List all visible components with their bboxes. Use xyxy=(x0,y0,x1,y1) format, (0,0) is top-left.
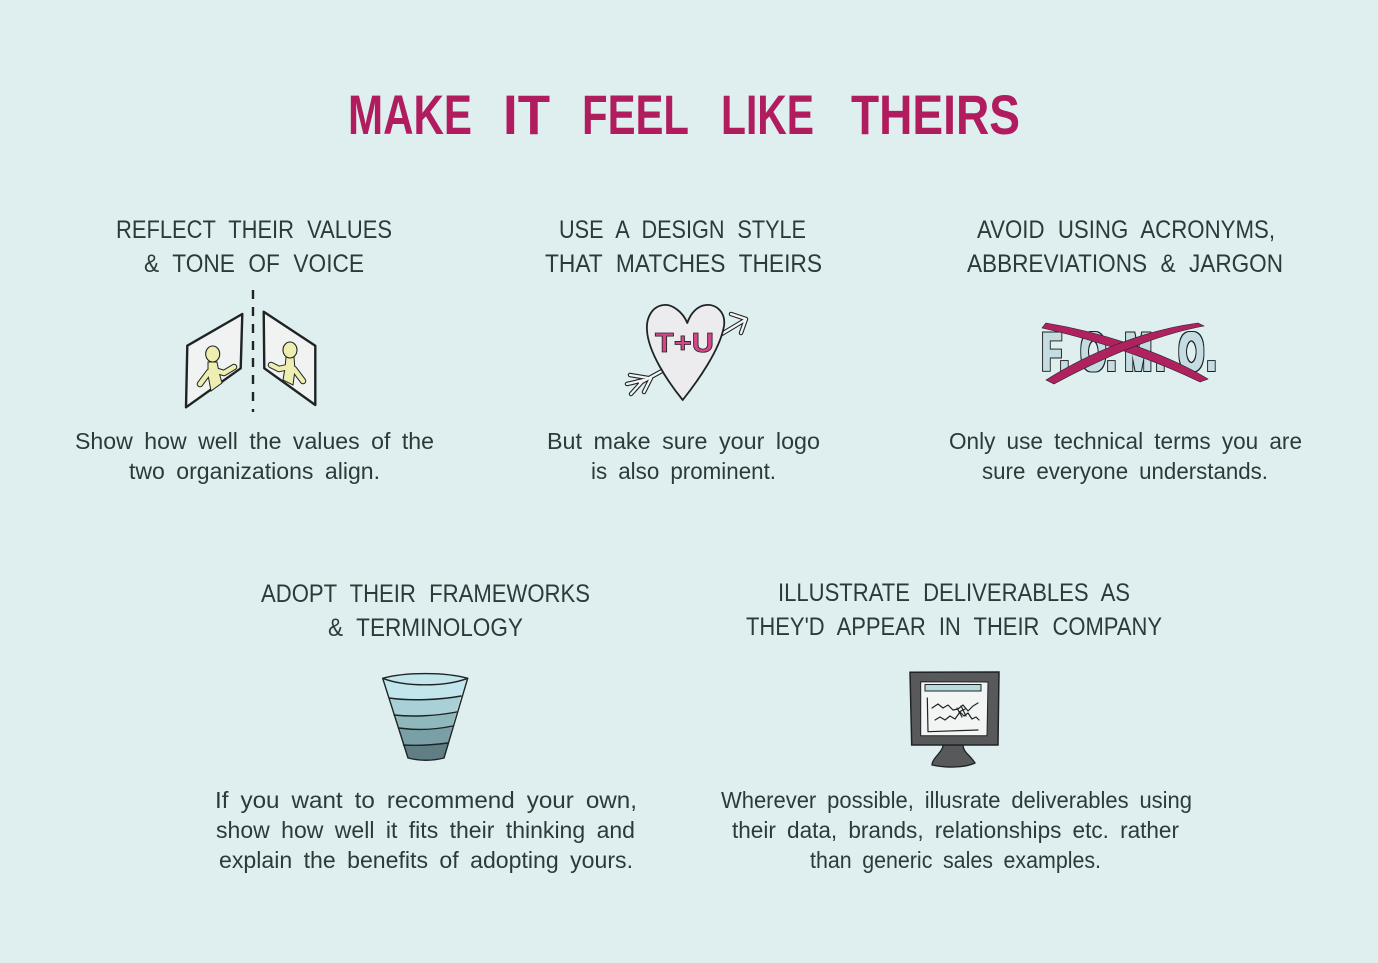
heading: illustrate deliverables: ILLUSTRATE DELIVERABLES AS xyxy=(778,579,1130,607)
text: avoid acronyms body: Only use technical terms you are xyxy=(949,428,1302,454)
icon: funnel xyxy=(383,674,468,760)
text: reflect values body: two organizations align. xyxy=(129,458,380,484)
heading: design style xyxy=(545,216,822,278)
text: design style body: But make sure your logo xyxy=(547,428,820,454)
text: avoid acronyms body xyxy=(949,428,1302,484)
icon: crossed out F.O.M.O.: F.O.M.O. xyxy=(1042,323,1216,382)
text: avoid acronyms body: sure everyone understands. xyxy=(982,458,1268,484)
text: reflect values body: Show how well the values of the xyxy=(75,428,434,454)
heading: reflect values xyxy=(116,216,392,278)
title: THEIRS xyxy=(851,83,1020,146)
panel: illustrate deliverables xyxy=(721,579,1192,873)
title xyxy=(348,83,1020,146)
text: adopt frameworks body xyxy=(215,787,637,873)
heading: avoid acronyms xyxy=(967,216,1283,278)
title: IT xyxy=(503,83,550,146)
icon: heart with arrow xyxy=(627,305,746,400)
icon: heart with arrow: T+U xyxy=(655,327,714,358)
text: adopt frameworks body: explain the benefits of adopting yours. xyxy=(219,847,633,873)
heading: design style: THAT MATCHES THEIRS xyxy=(545,250,822,278)
heading: avoid acronyms: ABBREVIATIONS & JARGON xyxy=(967,250,1283,278)
heading: illustrate deliverables: THEY'D APPEAR IN THEIR COMPANY xyxy=(746,613,1162,641)
text: adopt frameworks body: If you want to recommend your own, xyxy=(215,787,637,813)
text: illustrate deliverables body: Wherever possible, illusrate deliverables using xyxy=(721,787,1192,813)
panel: reflect values xyxy=(75,216,434,484)
heading: adopt frameworks xyxy=(261,580,590,642)
icon: mirrored figures xyxy=(186,290,315,412)
heading: illustrate deliverables xyxy=(746,579,1162,641)
panel: avoid acronyms xyxy=(949,216,1302,484)
title: FEEL xyxy=(582,83,689,146)
text: adopt frameworks body: show how well it fits their thinking and xyxy=(216,817,635,843)
heading: adopt frameworks: ADOPT THEIR FRAMEWORKS xyxy=(261,580,590,608)
text: illustrate deliverables body xyxy=(721,787,1192,873)
title: MAKE xyxy=(348,83,472,146)
icon: computer monitor xyxy=(910,672,999,767)
heading: design style: USE A DESIGN STYLE xyxy=(559,216,806,244)
title: LIKE xyxy=(721,83,814,146)
text: illustrate deliverables body: than generic sales examples. xyxy=(810,847,1101,873)
text: design style body xyxy=(547,428,820,484)
text: illustrate deliverables body: their data, brands, relationships etc. rather xyxy=(732,817,1179,843)
text: reflect values body xyxy=(75,428,434,484)
heading: reflect values: & TONE OF VOICE xyxy=(144,250,364,278)
panel: adopt frameworks xyxy=(215,580,637,873)
text: design style body: is also prominent. xyxy=(591,458,776,484)
panel: design style xyxy=(545,216,822,484)
heading: avoid acronyms: AVOID USING ACRONYMS, xyxy=(977,216,1275,244)
heading: adopt frameworks: & TERMINOLOGY xyxy=(328,614,523,642)
heading: reflect values: REFLECT THEIR VALUES xyxy=(116,216,392,244)
